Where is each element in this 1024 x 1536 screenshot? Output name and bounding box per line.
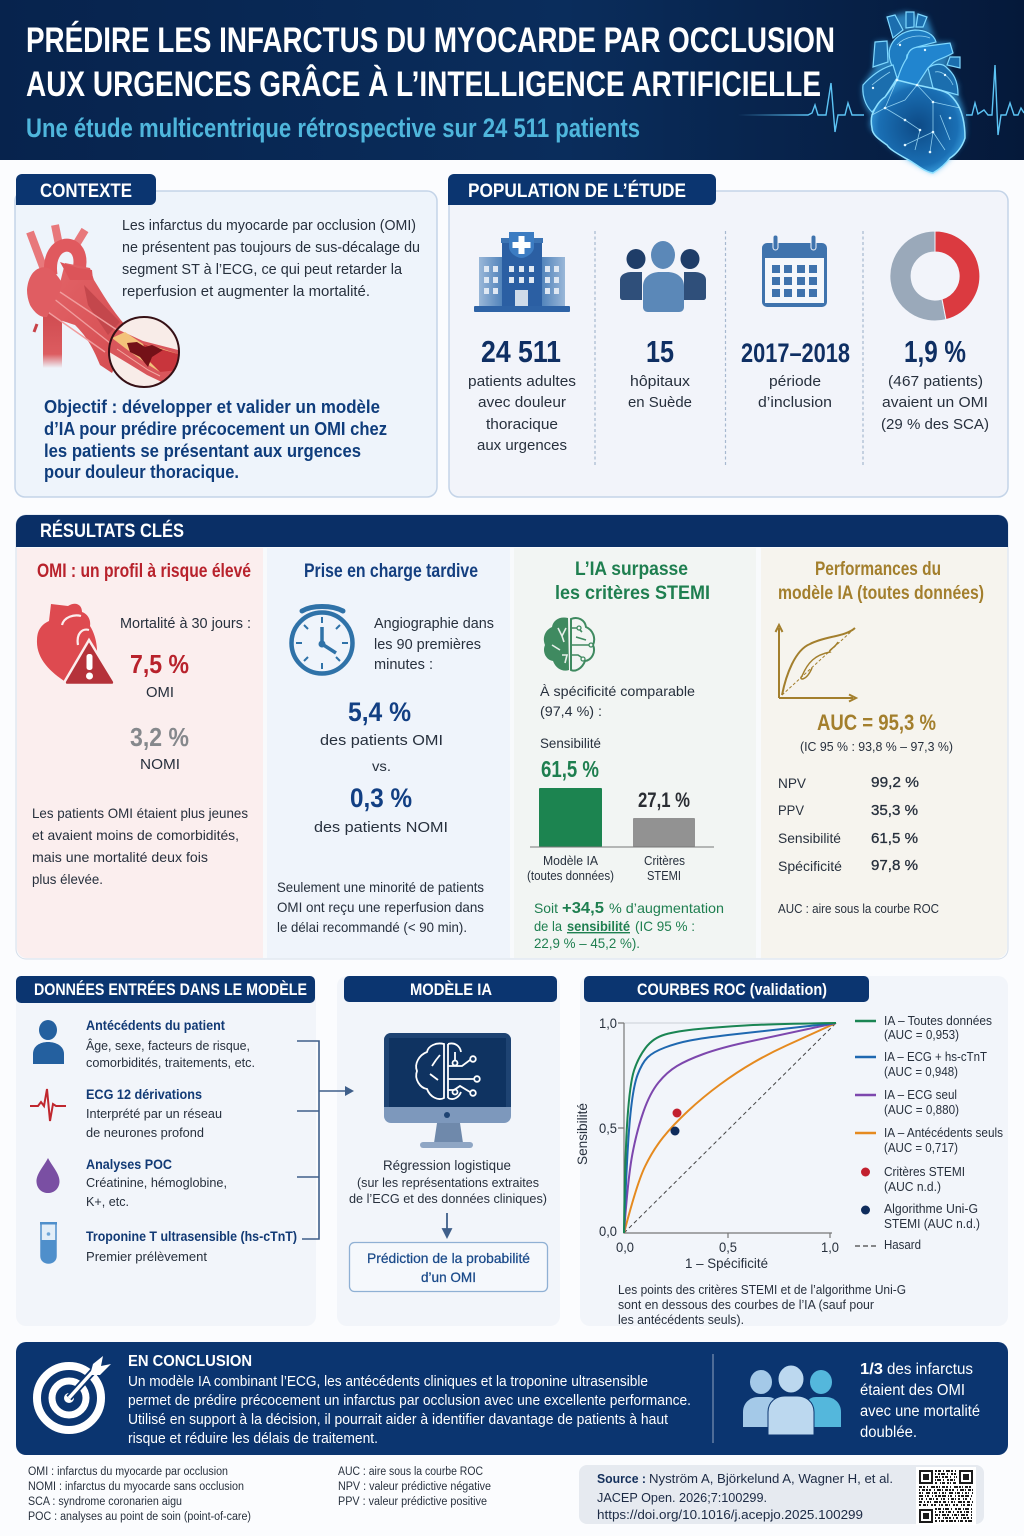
callout: gain de sensibilité: de la	[534, 918, 562, 934]
column: IA vs STEMI	[514, 548, 756, 958]
icon: computer with AI brain	[384, 1033, 511, 1148]
column: prise en charge tardive: vs.	[372, 758, 391, 774]
arrow: données vers modèle	[297, 1041, 354, 1239]
text: profil OMI	[32, 805, 248, 887]
item: ECG: Interprété par un réseau	[86, 1106, 222, 1121]
glossary: abbreviations column 1: NOMI : infarctus du myocarde sans occlusion	[28, 1481, 244, 1493]
icon: heart with occluded artery	[27, 225, 182, 387]
stat: prévalence OMI: 1,9 %	[904, 334, 966, 369]
stat: patients: patients adultes	[468, 374, 576, 390]
column: prise en charge tardive: Prise en charge tardive	[304, 561, 478, 582]
heading: population: POPULATION DE L’ÉTUDE	[468, 180, 686, 202]
stat: période: d’inclusion	[758, 395, 832, 411]
donut chart	[890, 231, 980, 321]
stat: période: période	[769, 374, 821, 390]
callout: 1/3 des infarctus: avec une mortalité	[860, 1403, 980, 1420]
item: ECG: ECG 12 dérivations	[86, 1086, 202, 1102]
text: reperfusion	[277, 879, 484, 935]
legend: IA – ECG + hs-cTnT	[884, 1050, 987, 1064]
arrow: vers prédiction	[443, 1213, 451, 1237]
column: profil OMI: OMI : un profil à risque élevé	[37, 561, 251, 582]
table: performance metrics: 97,8 %	[871, 857, 918, 874]
panel: source	[579, 1465, 984, 1525]
panel: résultats clés	[16, 515, 1008, 959]
curve: ECG + hs-cTnT	[624, 1023, 836, 1233]
icon: glowing anatomical heart	[863, 12, 966, 173]
title: AUX URGENCES GRÂCE À L’INTELLIGENCE ARTIFICIELLE	[26, 64, 821, 104]
stat: hôpitaux: hôpitaux	[630, 374, 691, 390]
citation: JACEP Open. 2026;7:100299.	[597, 1490, 767, 1505]
item: antécédents: Âge, sexe, facteurs de risque,	[86, 1038, 250, 1053]
column: performances du modèle: modèle IA (toutes données)	[778, 583, 984, 604]
text: conclusion: permet de prédire précocement un infarctus par occlusion avec une excellente performance.	[128, 1393, 691, 1409]
text: conclusion: Utilisé en support à la décision, il pourrait aider à identifier davantage de patients à haut	[128, 1412, 668, 1428]
heading: modèle IA: MODÈLE IA	[410, 980, 492, 999]
panel: modèle IA	[337, 976, 560, 1326]
item: ECG	[30, 1086, 222, 1140]
callout: gain de sensibilité: (IC 95 % :	[635, 918, 695, 934]
legend	[855, 1014, 1003, 1252]
item: analyses POC: Créatinine, hémoglobine,	[86, 1175, 227, 1190]
icon: group of patients	[743, 1365, 841, 1435]
text: profil OMI: mais une mortalité deux fois	[32, 849, 208, 865]
stat: patients: avec douleur	[478, 395, 566, 411]
bar chart: sensibilité: 27,1 %	[638, 789, 690, 812]
stat: période	[741, 235, 850, 411]
table: performance metrics: Sensibilité	[778, 830, 841, 846]
title: PRÉDIRE LES INFARCTUS DU MYOCARDE PAR OCCLUSION	[26, 20, 835, 60]
panel: courbes ROC	[574, 976, 1008, 1327]
icon: patient	[33, 1020, 64, 1064]
callout: gain de sensibilité: 22,9 % – 45,2 %).	[534, 935, 640, 951]
column: IA vs STEMI: L’IA surpasse	[575, 559, 688, 580]
heading: population	[448, 174, 716, 205]
icon: hospital	[474, 232, 570, 312]
stat: hôpitaux: 15	[646, 334, 674, 369]
line chart: ROC curves: 1,0	[599, 1015, 617, 1031]
callout: gain de sensibilité: Soit	[534, 900, 558, 916]
panel: données entrées dans le modèle	[16, 976, 316, 1326]
panel: contexte	[15, 174, 437, 497]
table: performance metrics: Spécificité	[778, 858, 842, 874]
icon: green brain	[544, 617, 594, 671]
heading: données	[16, 976, 315, 1003]
box: prédiction: d’un OMI	[421, 1269, 476, 1285]
glossary: abbreviations column 1: SCA : syndrome coronarien aigu	[28, 1496, 182, 1508]
note: courbes ROC: sont en dessous des courbes de l’IA (sauf pour	[618, 1298, 874, 1312]
text: profil OMI: Les patients OMI étaient plus jeunes	[32, 805, 248, 821]
glossary: abbreviations column 2: PPV : valeur prédictive positive	[338, 1496, 487, 1508]
stat: patients: aux urgences	[477, 438, 567, 454]
stat: patients: thoracique	[486, 417, 558, 433]
callout: 1/3 des infarctus: étaient des OMI	[860, 1382, 965, 1399]
heading: courbes ROC: COURBES ROC (validation)	[637, 980, 827, 999]
column: performances du modèle	[761, 548, 1007, 958]
column: performances du modèle: AUC : aire sous la courbe ROC	[778, 902, 939, 916]
legend: (AUC = 0,717)	[884, 1141, 958, 1155]
legend: (AUC = 0,953)	[884, 1028, 959, 1042]
glossary: abbreviations column 1: POC : analyses au point de soin (point-of-care)	[28, 1511, 251, 1523]
text: conclusion	[128, 1374, 691, 1447]
legend: IA – Antécédents seuls	[884, 1126, 1003, 1140]
bar chart: sensibilité: Modèle IA	[543, 853, 598, 868]
text: reperfusion: le délai recommandé (< 90 min).	[277, 919, 467, 935]
column: IA vs STEMI: À spécificité comparable	[540, 683, 695, 699]
callout: gain de sensibilité	[534, 900, 724, 951]
legend: (AUC = 0,948)	[884, 1065, 958, 1079]
callout: gain de sensibilité: +34,5	[562, 900, 604, 917]
legend: (AUC n.d.)	[884, 1180, 941, 1194]
table: performance metrics: NPV	[778, 775, 807, 791]
objective: d’IA pour prédire précocement un OMI chez	[44, 419, 387, 439]
column: IA vs STEMI: Sensibilité	[540, 735, 601, 751]
objective	[44, 397, 387, 482]
legend: Critères STEMI	[884, 1165, 965, 1179]
table: performance metrics: 99,2 %	[871, 774, 919, 791]
curve: toutes données	[624, 1023, 836, 1233]
glossary: abbreviations column 1	[28, 1466, 251, 1523]
column: profil OMI: OMI	[146, 685, 174, 701]
item: analyses POC: Analyses POC	[86, 1156, 172, 1172]
table: performance metrics	[778, 774, 919, 874]
text: conclusion: Un modèle IA combinant l’ECG, les antécédents cliniques et la troponine ultrasensible	[128, 1374, 648, 1390]
heading: données: DONNÉES ENTRÉES DANS LE MODÈLE	[34, 980, 307, 999]
icon: target with arrow	[37, 1356, 111, 1430]
text: régression logistique: (sur les représentations extraites	[357, 1175, 539, 1190]
legend: IA – Toutes données	[884, 1014, 992, 1028]
line chart: ROC curves: 0,5	[599, 1120, 617, 1136]
line chart: ROC curves: 0,0	[599, 1223, 617, 1239]
text: conclusion: risque et réduire les délais de traitement.	[128, 1431, 378, 1447]
heading: en conclusion: EN CONCLUSION	[128, 1353, 252, 1370]
note: courbes ROC	[618, 1283, 906, 1327]
item: antécédents: Antécédents du patient	[86, 1017, 225, 1033]
item: analyses POC	[36, 1156, 227, 1209]
citation	[597, 1471, 893, 1522]
column: prise en charge tardive: les 90 premières	[374, 637, 481, 653]
column: prise en charge tardive: Angiographie dans	[374, 616, 494, 632]
text: contexte: segment ST à l’ECG, ce qui peut retarder la	[122, 262, 403, 278]
item: ECG: de neurones profond	[86, 1125, 204, 1140]
callout: 1/3 des infarctus: 1/3	[860, 1361, 883, 1378]
legend: Hasard	[884, 1238, 921, 1252]
column: IA vs STEMI: les critères STEMI	[555, 583, 710, 604]
legend: IA – ECG seul	[884, 1088, 957, 1102]
stat: hôpitaux	[620, 241, 706, 411]
column: performances du modèle: (IC 95 % : 93,8 % – 97,3 %)	[800, 739, 953, 754]
legend: STEMI (AUC n.d.)	[884, 1217, 980, 1231]
column: profil OMI: 3,2 %	[130, 722, 189, 752]
callout: 1/3 des infarctus	[860, 1361, 980, 1441]
stat: patients	[468, 232, 576, 454]
stat: prévalence OMI: (467 patients)	[888, 374, 983, 390]
citation: Nyström A, Björkelund A, Wagner H, et al.	[649, 1471, 893, 1486]
legend: (AUC = 0,880)	[884, 1103, 959, 1117]
citation: https://doi.org/10.1016/j.acepjo.2025.100299	[597, 1507, 863, 1522]
glossary: abbreviations column 2: NPV : valeur prédictive négative	[338, 1481, 491, 1493]
callout: 1/3 des infarctus: doublée.	[860, 1424, 917, 1441]
item: troponine: Troponine T ultrasensible (hs-cTnT)	[86, 1228, 297, 1244]
column: prise en charge tardive: 0,3 %	[350, 783, 412, 813]
bar chart: sensibilité: STEMI	[647, 868, 681, 883]
bar chart: sensibilité: (toutes données)	[527, 868, 614, 883]
heading: résultats clés	[16, 515, 1008, 547]
callout: gain de sensibilité: % d’augmentation	[609, 900, 724, 916]
column: prise en charge tardive: des patients OMI	[320, 732, 443, 749]
text: reperfusion: Seulement une minorité de patients	[277, 879, 484, 895]
icon: group of people	[620, 241, 706, 312]
text: profil OMI: et avaient moins de comorbidités,	[32, 827, 239, 843]
table: performance metrics: PPV	[778, 802, 805, 818]
panel: population de l'étude	[448, 174, 1008, 497]
text: contexte: ne présentent pas toujours de sus-décalage du	[122, 240, 420, 256]
icon: blood drop	[36, 1158, 60, 1193]
line chart: ROC curves	[574, 1015, 839, 1271]
table: performance metrics: 61,5 %	[871, 830, 918, 847]
stat: prévalence OMI: avaient un OMI	[882, 395, 988, 411]
citation: Source :	[597, 1471, 646, 1486]
curve: ECG seul	[624, 1023, 836, 1233]
callout: 1/3 des infarctus: des infarctus	[887, 1361, 973, 1378]
icon: heart with warning	[37, 604, 114, 685]
box: prédiction	[350, 1242, 548, 1292]
box: prédiction: Prédiction de la probabilité	[367, 1250, 530, 1266]
point: Uni-G	[670, 1126, 680, 1136]
line chart: ROC curves: 1 – Spécificité	[685, 1255, 768, 1271]
legend: Algorithme Uni-G	[884, 1202, 978, 1216]
subtitle: Une étude multicentrique rétrospective sur 24 511 patients	[26, 113, 640, 143]
panel: en conclusion	[16, 1342, 1008, 1455]
text: contexte: Les infarctus du myocarde par occlusion (OMI)	[122, 218, 416, 234]
objective: les patients se présentant aux urgences	[44, 441, 361, 461]
stat: période: 2017–2018	[741, 338, 850, 368]
note: courbes ROC: Les points des critères STEMI et de l’algorithme Uni-G	[618, 1283, 906, 1297]
objective: Objectif : développer et valider un modèle	[44, 397, 380, 417]
item: analyses POC: K+, etc.	[86, 1194, 129, 1209]
column: prise en charge tardive: 5,4 %	[348, 697, 411, 727]
text: régression logistique: de l’ECG et des données cliniques)	[349, 1191, 547, 1206]
glossary: abbreviations column 2	[338, 1466, 491, 1508]
item: antécédents	[33, 1017, 255, 1070]
line chart: ROC curves: 0,0	[616, 1239, 634, 1255]
heading: contexte: CONTEXTE	[40, 181, 132, 202]
column: prise en charge tardive	[267, 548, 510, 958]
title	[26, 20, 835, 104]
text: profil OMI: plus élevée.	[32, 871, 103, 887]
line chart: ROC curves: Sensibilité	[574, 1103, 590, 1165]
column: profil OMI: Mortalité à 30 jours :	[120, 616, 251, 632]
stat: prévalence OMI	[881, 231, 989, 433]
icon: test tube	[40, 1222, 57, 1263]
item: troponine: Premier prélèvement	[86, 1249, 207, 1264]
glossary: abbreviations column 1: OMI : infarctus du myocarde par occlusion	[28, 1466, 228, 1478]
column: performances du modèle: AUC = 95,3 %	[817, 710, 936, 735]
column: IA vs STEMI: (97,4 %) :	[540, 703, 602, 719]
text: régression logistique	[349, 1157, 547, 1206]
text: reperfusion: OMI ont reçu une reperfusion dans	[277, 899, 484, 915]
callout: gain de sensibilité: sensibilité	[567, 918, 630, 934]
stat: prévalence OMI: (29 % des SCA)	[881, 417, 989, 433]
point: critères STEMI	[672, 1108, 682, 1118]
column: prise en charge tardive: minutes :	[374, 657, 433, 673]
icon: ECG pulse	[30, 1089, 66, 1121]
column: performances du modèle: Performances du	[815, 559, 941, 580]
ECG trace	[738, 65, 1024, 135]
item: troponine	[40, 1222, 297, 1264]
objective: pour douleur thoracique.	[44, 462, 239, 482]
QR code	[916, 1467, 976, 1525]
line chart: ROC curves: 1,0	[821, 1239, 839, 1255]
table: performance metrics: 35,3 %	[871, 802, 918, 819]
line chart: ROC curves: 0,5	[719, 1239, 737, 1255]
heading: résultats clés: RÉSULTATS CLÉS	[40, 520, 184, 542]
column: prise en charge tardive: des patients NOMI	[314, 819, 448, 836]
stat: patients: 24 511	[481, 334, 561, 369]
bar chart: sensibilité	[527, 756, 714, 883]
text: contexte	[122, 218, 420, 300]
note: courbes ROC: les antécédents seuls).	[618, 1313, 744, 1327]
column: profil OMI: NOMI	[140, 757, 180, 773]
glossary: abbreviations column 2: AUC : aire sous la courbe ROC	[338, 1466, 483, 1478]
curve: antécédents	[624, 1023, 836, 1233]
bar chart: sensibilité: Critères	[644, 853, 685, 868]
bar chart: sensibilité: 61,5 %	[541, 756, 599, 782]
icon: mini ROC curve	[776, 625, 856, 702]
text: contexte: reperfusion et augmenter la mortalité.	[122, 284, 370, 300]
header banner	[0, 0, 1024, 173]
column: profil OMI: 7,5 %	[130, 649, 189, 679]
stat: hôpitaux: en Suède	[628, 395, 692, 411]
heading: contexte	[16, 174, 156, 205]
column: profil OMI	[17, 548, 263, 958]
icon: clock	[292, 606, 352, 674]
item: antécédents: comorbidités, traitements, etc.	[86, 1055, 255, 1070]
heading: modèle IA	[344, 976, 557, 1002]
text: régression logistique: Régression logistique	[383, 1157, 511, 1173]
icon: calendar	[762, 235, 827, 307]
heading: courbes ROC	[584, 976, 869, 1002]
